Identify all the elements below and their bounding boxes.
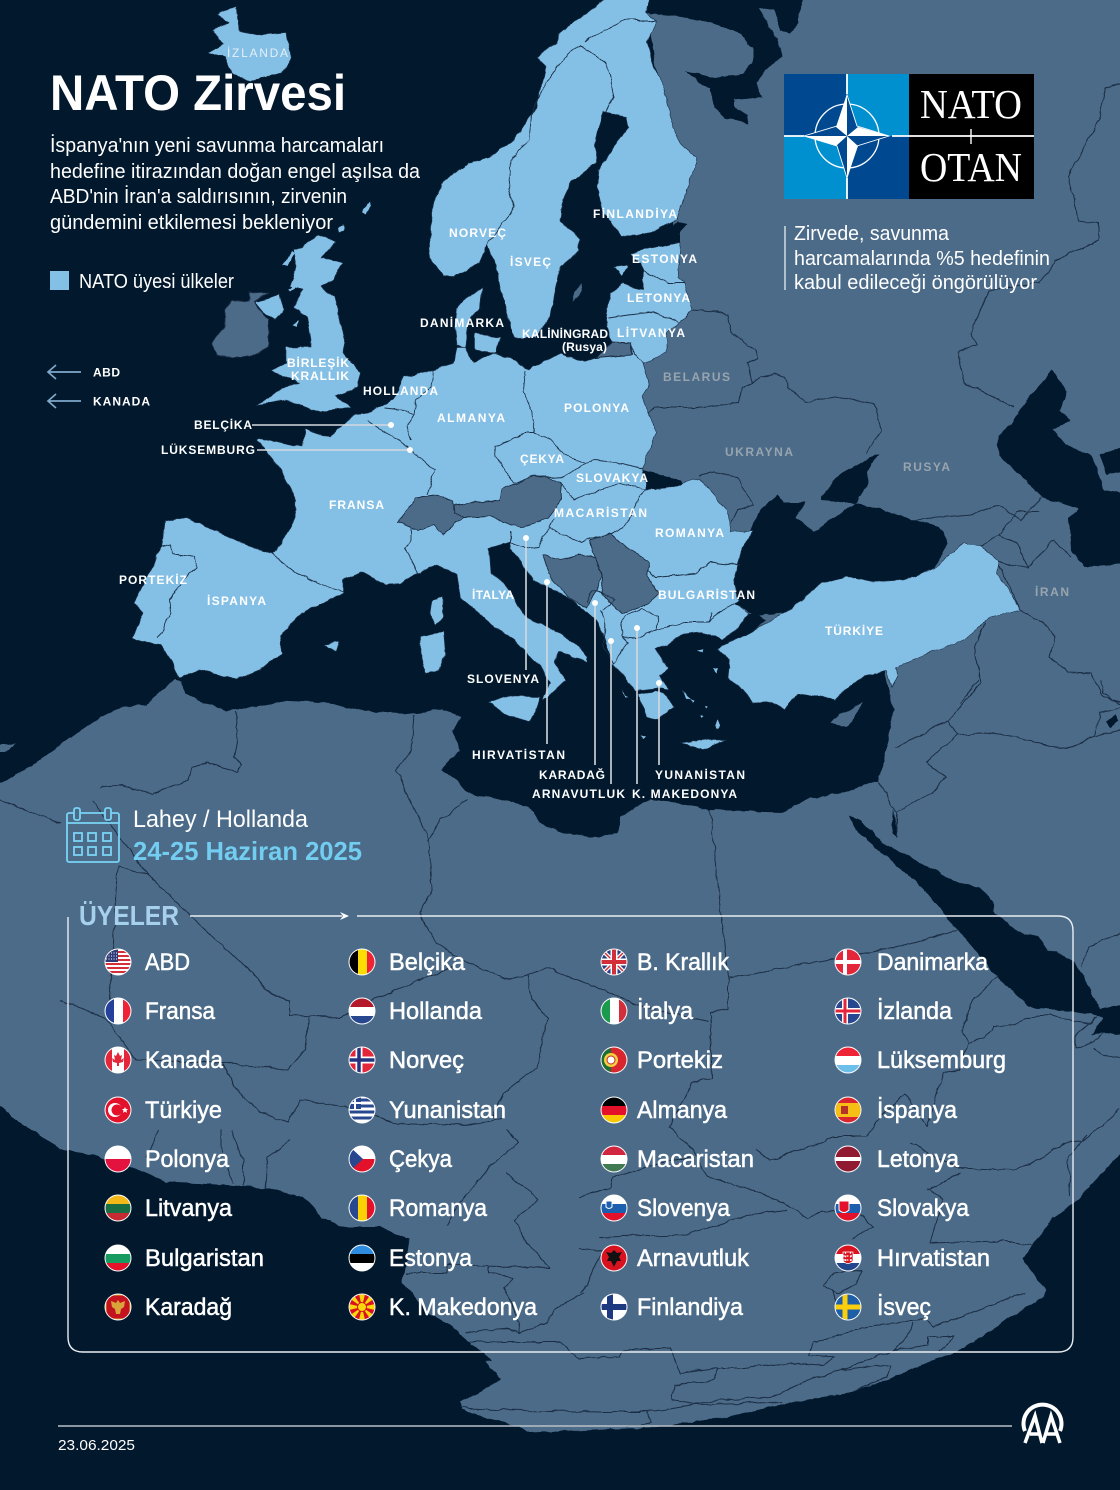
member: İtalya: İtalya xyxy=(637,998,694,1025)
member: İtalya xyxy=(600,998,694,1025)
member: Polonya xyxy=(104,1146,230,1173)
Serbia xyxy=(590,533,658,613)
member: Karadağ xyxy=(104,1294,232,1321)
label: Çekya: ÇEKYA xyxy=(520,452,564,466)
Denmark: Jutland xyxy=(455,288,482,347)
callout: Belçika xyxy=(194,417,394,432)
Saaremaa xyxy=(614,265,628,277)
member: Çekya xyxy=(348,1146,453,1173)
label: İran: İRAN xyxy=(1035,584,1069,599)
callout: Karadağ: KARADAĞ xyxy=(539,767,605,782)
label: Belarus: BELARUS xyxy=(663,370,730,384)
callout: Lüksemburg xyxy=(161,442,413,457)
member: Yunanistan: Yunanistan xyxy=(389,1097,506,1124)
Corsica xyxy=(430,597,443,625)
heading: members: ÜYELER xyxy=(79,900,179,931)
sea: Persian Gulf xyxy=(1106,714,1119,728)
member: Estonya: Estonya xyxy=(389,1245,473,1272)
subtitle text block: İspanya'nın yeni savunma harcamaları xyxy=(50,134,384,157)
member: B. Krallık xyxy=(600,948,730,976)
member: Lüksemburg: Lüksemburg xyxy=(877,1047,1006,1074)
callout: Lüksemburg: LÜKSEMBURG xyxy=(161,442,255,457)
label: Birleşik: BİRLEŞİK xyxy=(287,355,349,370)
Bosnia xyxy=(543,555,602,608)
member: Slovenya xyxy=(600,1194,731,1222)
member: B. Krallık: B. Krallık xyxy=(637,949,730,976)
arrow: ABD xyxy=(48,365,120,380)
member: Çekya: Çekya xyxy=(389,1146,453,1173)
callout: Kuzey Makedonya xyxy=(632,625,737,801)
Türkiye xyxy=(717,543,1021,710)
seas: Black Sea and Azov xyxy=(733,453,948,616)
summit place: Lahey / Hollanda xyxy=(133,806,309,833)
sea: Gulf of Aqaba xyxy=(892,808,898,838)
member: Hollanda: Hollanda xyxy=(389,998,483,1025)
member: Slovenya: Slovenya xyxy=(637,1195,731,1222)
member: Belçika: Belçika xyxy=(389,949,466,976)
Denmark: islands xyxy=(475,333,500,353)
member: Bulgaristan: Bulgaristan xyxy=(145,1245,264,1272)
note text block: kabul edileceği öngörülüyor xyxy=(794,272,1037,294)
Mallorca xyxy=(323,642,339,652)
callout: Arnavutluk: ARNAVUTLUK xyxy=(532,787,625,801)
arrow: Kanada xyxy=(48,394,150,408)
member: Danimarka: Danimarka xyxy=(877,949,989,976)
member: İsveç xyxy=(834,1294,931,1321)
members panel frame xyxy=(68,912,1073,1352)
Northern Ireland xyxy=(255,295,284,320)
member: Norveç: Norveç xyxy=(389,1047,464,1074)
label: Slovakya: SLOVAKYA xyxy=(576,471,648,485)
member: Norveç xyxy=(348,1046,464,1074)
callout: Slovenya: SLOVENYA xyxy=(467,672,539,686)
member: ABD xyxy=(104,948,190,976)
subtitle text block: ABD'nin İran'a saldırısının, zirvenin xyxy=(50,185,347,208)
member: Romanya: Romanya xyxy=(389,1195,488,1222)
member: Slovakya: Slovakya xyxy=(877,1195,970,1222)
note text block: harcamalarında %5 hedefinin xyxy=(794,248,1050,270)
sea: Marmara xyxy=(716,613,766,648)
sea: Red Sea and Gulf of Aden xyxy=(850,815,1120,1037)
member: Litvanya: Litvanya xyxy=(145,1195,233,1222)
label: Estonya: ESTONYA xyxy=(632,252,697,266)
label: Krallık: KRALLIK xyxy=(291,369,349,383)
Cyprus xyxy=(831,703,864,727)
label: Norveç: NORVEÇ xyxy=(449,226,506,240)
member: Litvanya xyxy=(104,1194,233,1222)
member: Fransa: Fransa xyxy=(145,998,216,1025)
label: Polonya: POLONYA xyxy=(564,401,629,415)
subtitle text block xyxy=(50,134,421,234)
member: Karadağ: Karadağ xyxy=(145,1294,232,1321)
Switzerland xyxy=(398,495,464,535)
subtitle text block: hedefine itirazından doğan engel aşılsa da xyxy=(50,161,421,183)
label: İspanya: İSPANYA xyxy=(207,593,266,608)
member: Portekiz: Portekiz xyxy=(637,1047,723,1074)
note text block: Zirvede, savunma xyxy=(794,223,950,245)
member: Hollanda xyxy=(348,998,483,1025)
label: Danimarka: DANİMARKA xyxy=(420,315,504,330)
United Kingdom xyxy=(257,235,361,412)
member: Fransa xyxy=(104,998,216,1025)
date: 23.06.2025 xyxy=(58,1438,135,1454)
member: Estonya xyxy=(348,1244,473,1272)
Ireland xyxy=(211,292,268,357)
note text block xyxy=(785,223,1050,294)
label: İtalya: İTALYA xyxy=(472,587,514,602)
label: Letonya: LETONYA xyxy=(627,291,690,305)
callout: Kuzey Makedonya: K. MAKEDONYA xyxy=(632,787,737,801)
label: Rusya note: (Rusya) xyxy=(562,340,607,354)
member: Kanada: Kanada xyxy=(145,1047,224,1074)
label: Macaristan: MACARİSTAN xyxy=(554,505,647,520)
member: Finlandiya: Finlandiya xyxy=(637,1294,744,1321)
member: İspanya: İspanya xyxy=(877,1097,958,1124)
NATO OTAN logo: OTAN xyxy=(920,144,1022,190)
label: Rusya: RUSYA xyxy=(903,460,950,474)
member: Türkiye xyxy=(104,1096,222,1124)
Iceland xyxy=(207,7,291,80)
callout: Yunanistan xyxy=(655,680,745,782)
Peloponnese xyxy=(638,690,673,720)
Gotland xyxy=(573,283,583,302)
arrow: Kanada: KANADA xyxy=(93,394,150,408)
Scandinavia: Norway, Sweden, Finland xyxy=(430,0,697,338)
summit date: 24-25 Haziran 2025 xyxy=(133,836,362,866)
member: Slovakya xyxy=(834,1194,970,1222)
sea: Caspian xyxy=(997,370,1120,567)
NATO OTAN logo: NATO xyxy=(920,81,1022,127)
Sicily xyxy=(488,697,539,723)
icon: AA logo xyxy=(1024,1405,1062,1443)
member: İspanya xyxy=(834,1096,958,1124)
label: Litvanya: LİTVANYA xyxy=(617,325,685,340)
label: Ukrayna: UKRAYNA xyxy=(725,445,793,459)
label: İzlanda: İZLANDA xyxy=(227,46,288,60)
member: Letonya xyxy=(834,1146,960,1173)
label: Kaliningrad: KALİNİNGRAD xyxy=(522,326,608,341)
icon: calendar xyxy=(67,808,119,862)
subtitle text block: gündemini etkilemesi bekleniyor xyxy=(50,212,333,234)
label: Almanya: ALMANYA xyxy=(437,411,505,425)
member: İsveç: İsveç xyxy=(877,1294,931,1321)
sea: north Caspian strip xyxy=(1100,445,1120,475)
member: İzlanda: İzlanda xyxy=(877,998,953,1025)
callout: Hırvatistan: HIRVATİSTAN xyxy=(472,747,565,762)
callout: Belçika: BELÇİKA xyxy=(194,417,252,432)
member: Belçika xyxy=(348,948,466,976)
member: Arnavutluk: Arnavutluk xyxy=(637,1245,750,1272)
label: Romanya: ROMANYA xyxy=(655,526,724,540)
member: Almanya: Almanya xyxy=(637,1097,728,1124)
sea: Morocco corner xyxy=(0,744,15,752)
member: Türkiye: Türkiye xyxy=(145,1097,222,1124)
member: İzlanda xyxy=(834,998,953,1025)
callout: Arnavutluk xyxy=(532,638,625,801)
member: ABD: ABD xyxy=(145,949,190,976)
sea: Gulf of Finland xyxy=(640,222,688,245)
label: Finlandiya: FİNLANDİYA xyxy=(593,206,677,221)
footer line xyxy=(58,1425,1012,1427)
Kaliningrad xyxy=(596,342,631,358)
NATO OTAN logo xyxy=(784,74,1034,199)
title: NATO Zirvesi xyxy=(50,65,346,121)
member: Portekiz xyxy=(600,1046,723,1074)
arrow: ABD: ABD xyxy=(93,366,120,380)
label: İsveç: İSVEÇ xyxy=(510,254,551,269)
member: K. Makedonya: K. Makedonya xyxy=(389,1294,538,1321)
member: Kanada xyxy=(104,1046,224,1074)
member: Polonya: Polonya xyxy=(145,1146,230,1173)
legend: NATO members: NATO üyesi ülkeler xyxy=(79,271,234,293)
member: Letonya: Letonya xyxy=(877,1146,960,1173)
Hebrides, Orkney and Shetland xyxy=(283,202,372,327)
Austria xyxy=(454,475,562,528)
Crete xyxy=(680,740,726,748)
Sardinia xyxy=(421,632,445,673)
callout: Karadağ xyxy=(539,600,605,782)
continental NATO members xyxy=(132,242,753,700)
member: Danimarka xyxy=(834,948,989,976)
member: Almanya xyxy=(600,1096,728,1124)
label: Bulgaristan: BULGARİSTAN xyxy=(658,587,755,602)
member borders xyxy=(157,20,740,663)
label: Portekiz: PORTEKİZ xyxy=(119,572,187,587)
Aegean islets xyxy=(622,625,720,739)
label: Fransa: FRANSA xyxy=(329,498,384,512)
callout: Slovenya xyxy=(467,535,539,686)
label: Türkiye: TÜRKİYE xyxy=(825,623,883,638)
member: Romanya xyxy=(348,1194,488,1222)
callout: Yunanistan: YUNANİSTAN xyxy=(655,767,745,782)
callout: Hırvatistan xyxy=(472,579,565,762)
member: Macaristan: Macaristan xyxy=(637,1146,754,1173)
member: Hırvatistan: Hırvatistan xyxy=(877,1245,990,1272)
label: Hollanda: HOLLANDA xyxy=(363,384,438,398)
